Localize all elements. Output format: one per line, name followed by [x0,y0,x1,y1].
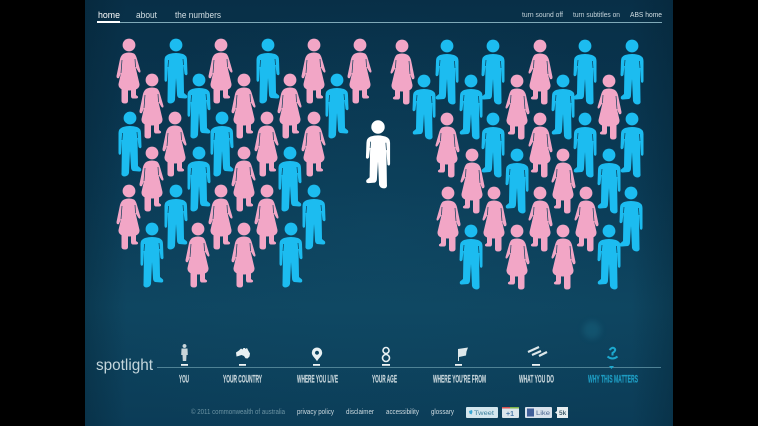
man [460,75,482,140]
nav rule [97,22,662,23]
man [620,40,644,104]
left crowd [116,39,372,287]
link: glossary: glossary [431,409,454,416]
man [552,75,574,140]
man [460,225,482,290]
woman [506,225,530,290]
woman [232,74,256,138]
icon: question mark [608,348,618,358]
text: YOUR COUNTRY [223,374,262,386]
icon: tools [528,347,547,356]
footer links [191,408,454,416]
woman [528,187,552,252]
link: disclaimer: disclaimer [346,409,375,416]
woman [116,39,140,104]
timeline step: why this matters [588,348,638,386]
spotlight wordmark: spotlight [96,357,154,374]
timeline step: what you do [519,347,554,386]
icon: flag [458,348,468,361]
woman [254,185,278,250]
text: WHAT YOU DO [519,374,554,386]
woman [116,185,140,250]
woman [598,75,622,140]
timeline step: your age [372,348,397,386]
woman [552,149,576,214]
tweet button [466,407,498,418]
like count [555,407,568,418]
man [210,112,234,176]
facebook like button: Like [536,410,550,417]
copyright: © 2011 commonwealth of australia [191,408,285,416]
woman [460,149,484,214]
woman [482,187,506,252]
man [412,75,436,140]
man [302,185,326,250]
tweet button: Tweet [474,410,494,417]
timeline step: where you're from [433,348,486,386]
woman [436,113,460,178]
nav: about: about [136,10,157,20]
timeline step: your country [223,348,262,386]
nav: the numbers: the numbers [175,10,221,20]
woman [506,75,530,140]
icon: hourglass [382,348,390,362]
woman [436,187,460,252]
icon: australia map [236,348,250,358]
woman [254,112,278,176]
text: WHERE YOU LIVE [297,374,338,386]
icon: map pin [312,348,322,361]
woman [208,185,232,250]
facebook like button [525,407,552,418]
link: turn subtitles on: turn subtitles on [573,10,620,19]
google plus one button [502,407,519,418]
man [574,40,596,104]
text: WHERE YOU'RE FROM [433,374,486,386]
link: accessibility: accessibility [386,409,419,416]
man [598,225,620,290]
text: YOU [179,374,189,386]
icon: person [181,344,188,361]
man [256,39,280,104]
man [598,149,620,214]
man [620,113,644,178]
woman [140,74,164,138]
timeline step: where you live [297,348,338,386]
man [506,149,528,214]
man [326,74,348,138]
blue stage panel [85,0,673,426]
nav active underline [97,21,120,23]
man [436,40,458,104]
timeline rule [157,367,661,368]
woman [528,113,552,178]
nav: home: home [98,10,120,20]
timeline step: you [179,344,189,386]
man [140,223,164,288]
man [278,147,302,212]
man [164,185,188,250]
woman [574,187,598,252]
woman [232,147,256,212]
woman [232,223,256,288]
man [482,113,504,178]
woman [528,40,552,104]
man [482,40,504,104]
link: ABS home: ABS home [630,10,662,19]
man [188,147,210,212]
woman [140,147,164,212]
man [620,187,642,252]
man [118,112,142,176]
man [280,223,302,288]
woman [302,39,326,104]
link: turn sound off: turn sound off [522,10,564,19]
woman [390,40,414,104]
central white figure [366,120,390,188]
text: WHY THIS MATTERS [588,374,638,386]
like count: 5k [559,410,567,417]
man [164,39,188,104]
woman [302,112,326,176]
woman [552,225,576,290]
google plus one button: +1 [506,411,514,418]
right crowd [390,40,644,289]
top navigation [97,10,662,23]
woman [186,223,210,288]
text: YOUR AGE [372,374,397,386]
woman [162,112,186,176]
man [574,113,596,178]
woman [348,39,372,104]
link: privacy policy: privacy policy [297,409,334,416]
woman [208,39,232,104]
woman [278,74,302,138]
man [188,74,210,138]
